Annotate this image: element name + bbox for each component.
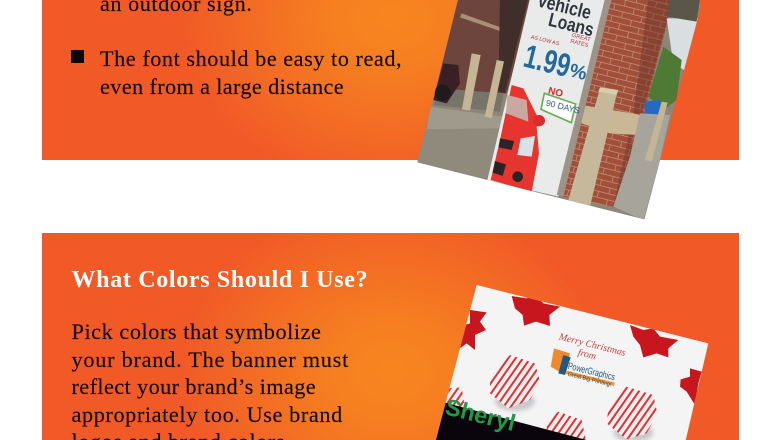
panel: font advice — [42, 0, 739, 160]
panel: colors advice — [42, 233, 739, 440]
image: vehicle loans sign photo: Sheryl — [443, 394, 518, 436]
image: vehicle loans sign photo: Loans — [546, 10, 596, 41]
text: font bullet: The font should be easy to read, — [100, 46, 402, 71]
text: colors paragraph: Pick colors that symbolize — [72, 319, 321, 344]
text: font bullet — [100, 46, 402, 99]
image: vehicle loans sign photo: % — [567, 60, 589, 85]
image: vehicle loans sign photo: PowerGraphics — [567, 361, 616, 383]
image: vehicle loans sign photo: Great Big Printing! — [567, 371, 612, 389]
text: font bullet: even from a large distance — [100, 74, 344, 99]
text: colors paragraph: your brand. The banner must — [72, 347, 349, 372]
image: vehicle loans sign photo: from — [577, 347, 597, 362]
image: vehicle loans sign photo: GREAT — [571, 33, 592, 43]
image: vehicle loans sign photo: AS LOW AS — [530, 34, 560, 47]
text: colors paragraph: reflect your brand’s image — [72, 374, 316, 399]
text: colors paragraph — [72, 319, 349, 440]
image: vehicle loans sign photo: 1.99 — [520, 37, 575, 84]
image: vehicle loans sign photo — [417, 0, 708, 440]
icon: square bullet — [71, 50, 84, 63]
image: vehicle loans sign photo: NO — [547, 86, 564, 100]
image: vehicle loans sign photo: 90 DAYS — [545, 98, 581, 116]
image: vehicle loans sign photo: RATES — [570, 39, 589, 49]
heading: what colors: What Colors Should I Use? — [72, 267, 368, 293]
text: colors paragraph: appropriately too. Use brand — [72, 402, 343, 427]
image: vehicle loans sign photo: Merry Christmas — [557, 331, 627, 359]
